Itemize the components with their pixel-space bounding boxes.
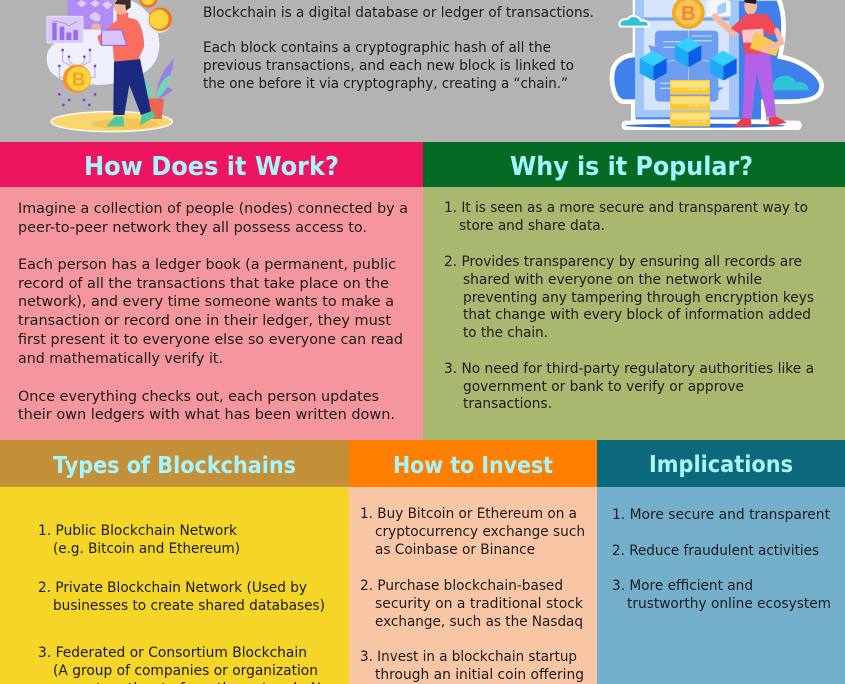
text block: invest list: exchange, such as the Nasdaq: [375, 614, 583, 630]
panel: types of blockchains: [0, 440, 349, 684]
panel background: [0, 187, 423, 440]
text block: reasons list: that change with every block of information added: [463, 307, 811, 323]
text block: reasons list: to the chain.: [463, 325, 548, 341]
text block: how it works: transaction or record one in their ledger, they must: [18, 313, 391, 329]
text block: reasons list: government or bank to verify or approve: [463, 379, 744, 395]
heading: types of blockchains: Types of Blockchains: [53, 453, 296, 479]
intro text: Blockchain is a digital database or ledger of transactions.: [203, 5, 594, 21]
text block: implications list: 3. More efficient and: [612, 578, 753, 594]
heading bar: why is it popular: [423, 142, 845, 187]
illustration: person beside blockchain device: [612, 0, 822, 130]
text block: reasons list: shared with everyone on the network while: [463, 272, 762, 288]
panel background: [423, 187, 845, 440]
text block: how it works: and mathematically verify it.: [18, 351, 223, 367]
heading: why is it popular: Why is it Popular?: [510, 152, 753, 182]
illustration: person beside blockchain device: B: [681, 3, 696, 25]
text block: types list: [38, 523, 325, 684]
panel background: [597, 487, 845, 684]
text block: types list: businesses to create shared databases): [53, 598, 325, 614]
intro text: Each block contains a cryptographic hash of all the: [203, 40, 551, 56]
text block: how it works: first present it to everyone else so everyone can read: [18, 332, 403, 348]
text block: implications list: trustworthy online ecosystem: [627, 596, 831, 612]
text block: invest list: as Coinbase or Binance: [375, 542, 535, 558]
intro text: previous transactions, and each new block is linked to: [203, 58, 574, 74]
text block: types list: 1. Public Blockchain Network: [38, 523, 238, 539]
text block: invest list: [360, 506, 585, 683]
text block: invest list: through an initial coin offering: [375, 667, 584, 683]
heading: implications: Implications: [649, 452, 793, 478]
text block: implications list: [612, 507, 831, 612]
text block: reasons list: [444, 200, 814, 412]
heading bar: how does it work: [0, 142, 423, 187]
panel: implications: [597, 440, 845, 684]
text block: reasons list: store and share data.: [459, 218, 605, 234]
text block: reasons list: preventing any tampering through encryption keys: [463, 290, 814, 306]
text block: how it works: network), and every time someone wants to make a: [18, 294, 394, 310]
text block: invest list: 3. Invest in a blockchain startup: [360, 649, 577, 665]
text block: how it works: peer-to-peer network they all possess access to.: [18, 220, 367, 236]
text block: how it works: Once everything checks out, each person updates: [18, 389, 379, 405]
text block: invest list: security on a traditional stock: [375, 596, 584, 612]
text block: how it works: their own ledgers with what has been written down.: [18, 407, 395, 423]
text block: reasons list: 1. It is seen as a more secure and transparent way to: [444, 200, 808, 216]
text block: reasons list: transactions.: [463, 396, 552, 412]
text block: reasons list: 3. No need for third-party regulatory authorities like a: [444, 361, 814, 377]
text block: invest list: 1. Buy Bitcoin or Ethereum on a: [360, 506, 577, 522]
illustration: person with laptop and bitcoin: [47, 0, 174, 132]
heading bar: implications: [597, 440, 845, 487]
text block: invest list: cryptocurrency exchange such: [375, 524, 585, 540]
text block: invest list: 2. Purchase blockchain-based: [360, 578, 563, 594]
text block: how it works: Each person has a ledger book (a permanent, public: [18, 257, 396, 273]
text block: types list: (e.g. Bitcoin and Ethereum): [53, 541, 240, 557]
intro text: the one before it via cryptography, creating a “chain.”: [203, 76, 568, 92]
illustration: person with laptop and bitcoin: B: [72, 68, 85, 89]
panel: how does it work: [0, 142, 423, 440]
text block: how it works: Imagine a collection of people (nodes) connected by a: [18, 201, 408, 217]
intro text: [203, 5, 594, 92]
panel background: [0, 487, 349, 684]
panel: intro header band: [0, 0, 845, 142]
panel: how to invest: [349, 440, 597, 684]
heading: how does it work: How Does it Work?: [84, 152, 339, 182]
text block: types list: 2. Private Blockchain Network (Used by: [38, 580, 307, 596]
heading bar: invest: [349, 440, 597, 487]
heading: how to invest: How to Invest: [393, 453, 553, 479]
panel: why is it popular: [423, 142, 845, 440]
panel background: [349, 487, 597, 684]
text block: how it works: [18, 201, 408, 423]
text block: types list: (A group of companies or organization: [53, 663, 318, 679]
text block: implications list: 1. More secure and transparent: [612, 507, 830, 523]
text block: types list: 3. Federated or Consortium Blockchain: [38, 645, 307, 661]
text block: reasons list: 2. Provides transparency by ensuring all records are: [444, 254, 802, 270]
text block: implications list: 2. Reduce fraudulent activities: [612, 543, 819, 559]
heading bar: types: [0, 440, 349, 487]
text block: how it works: record of all the transactions that take place on the: [18, 276, 389, 292]
